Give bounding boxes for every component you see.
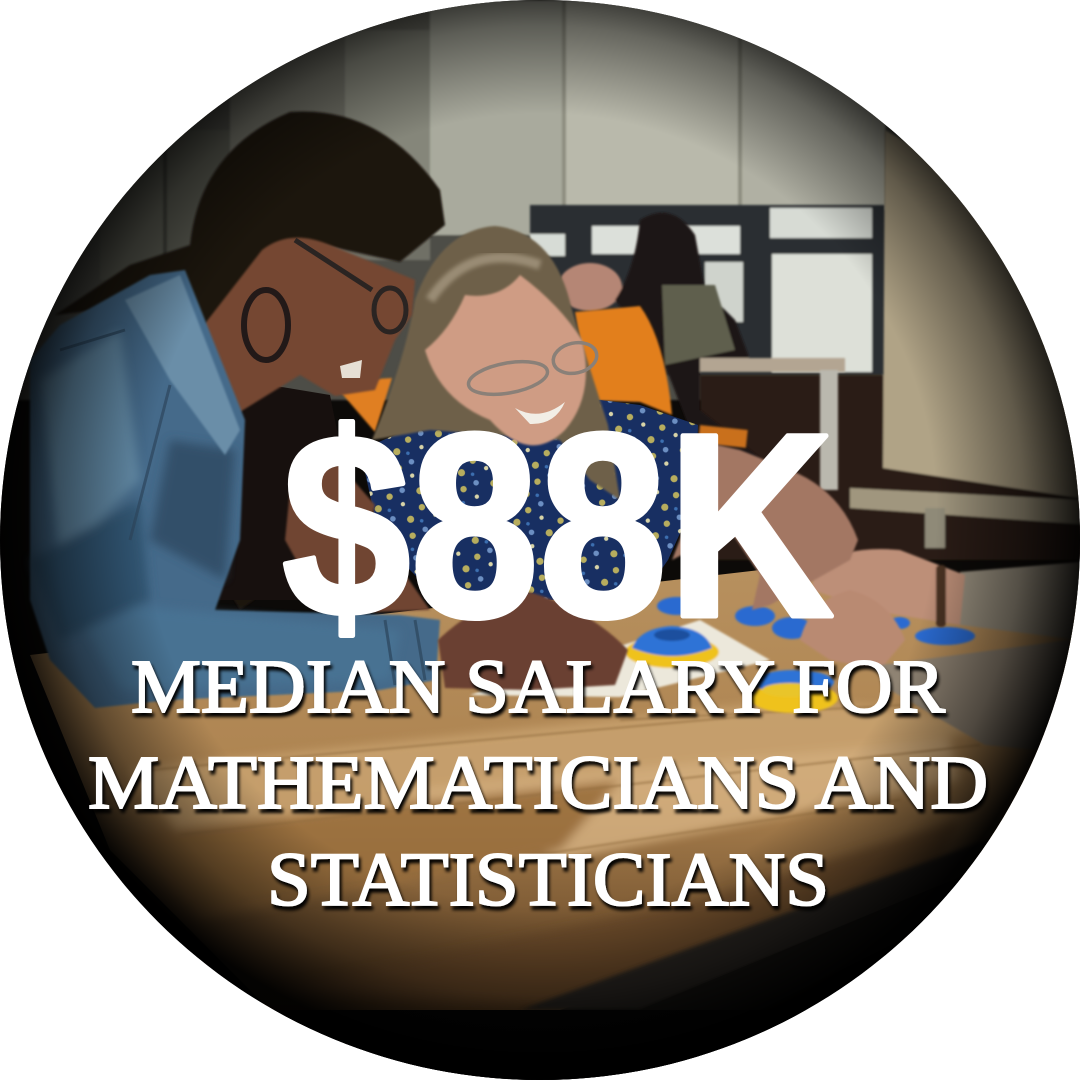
caption (88, 645, 988, 922)
dark hair (55, 111, 445, 610)
woman in denim jacket (30, 111, 628, 708)
background student and desk (558, 213, 845, 490)
hands (285, 465, 430, 612)
woman in floral blouse (360, 226, 858, 610)
jacket seams (60, 330, 425, 685)
right partition (700, 130, 1080, 560)
denim jacket (30, 270, 440, 708)
caption: MATHEMATICIANS AND (88, 741, 988, 825)
glasses (466, 339, 600, 400)
table (30, 570, 1080, 1010)
arm (672, 440, 858, 610)
hoop earring (244, 290, 288, 360)
face (425, 275, 586, 445)
caption: MEDIAN SALARY FOR (131, 645, 945, 729)
face and neck (200, 238, 415, 415)
caption: STATISTICIANS (267, 838, 829, 922)
dark glasses (295, 240, 406, 332)
background wall and blinds (0, 0, 1080, 400)
plank lines (154, 704, 956, 854)
paper and blue-yellow stacking pieces (470, 597, 975, 713)
right person's hands and sleeve (798, 540, 1080, 752)
orange chair (332, 306, 748, 448)
table edge shadow (250, 835, 1010, 1080)
big salary figure: $88K (282, 379, 834, 672)
window (530, 205, 885, 375)
blouse (360, 400, 698, 600)
hair (372, 226, 620, 500)
